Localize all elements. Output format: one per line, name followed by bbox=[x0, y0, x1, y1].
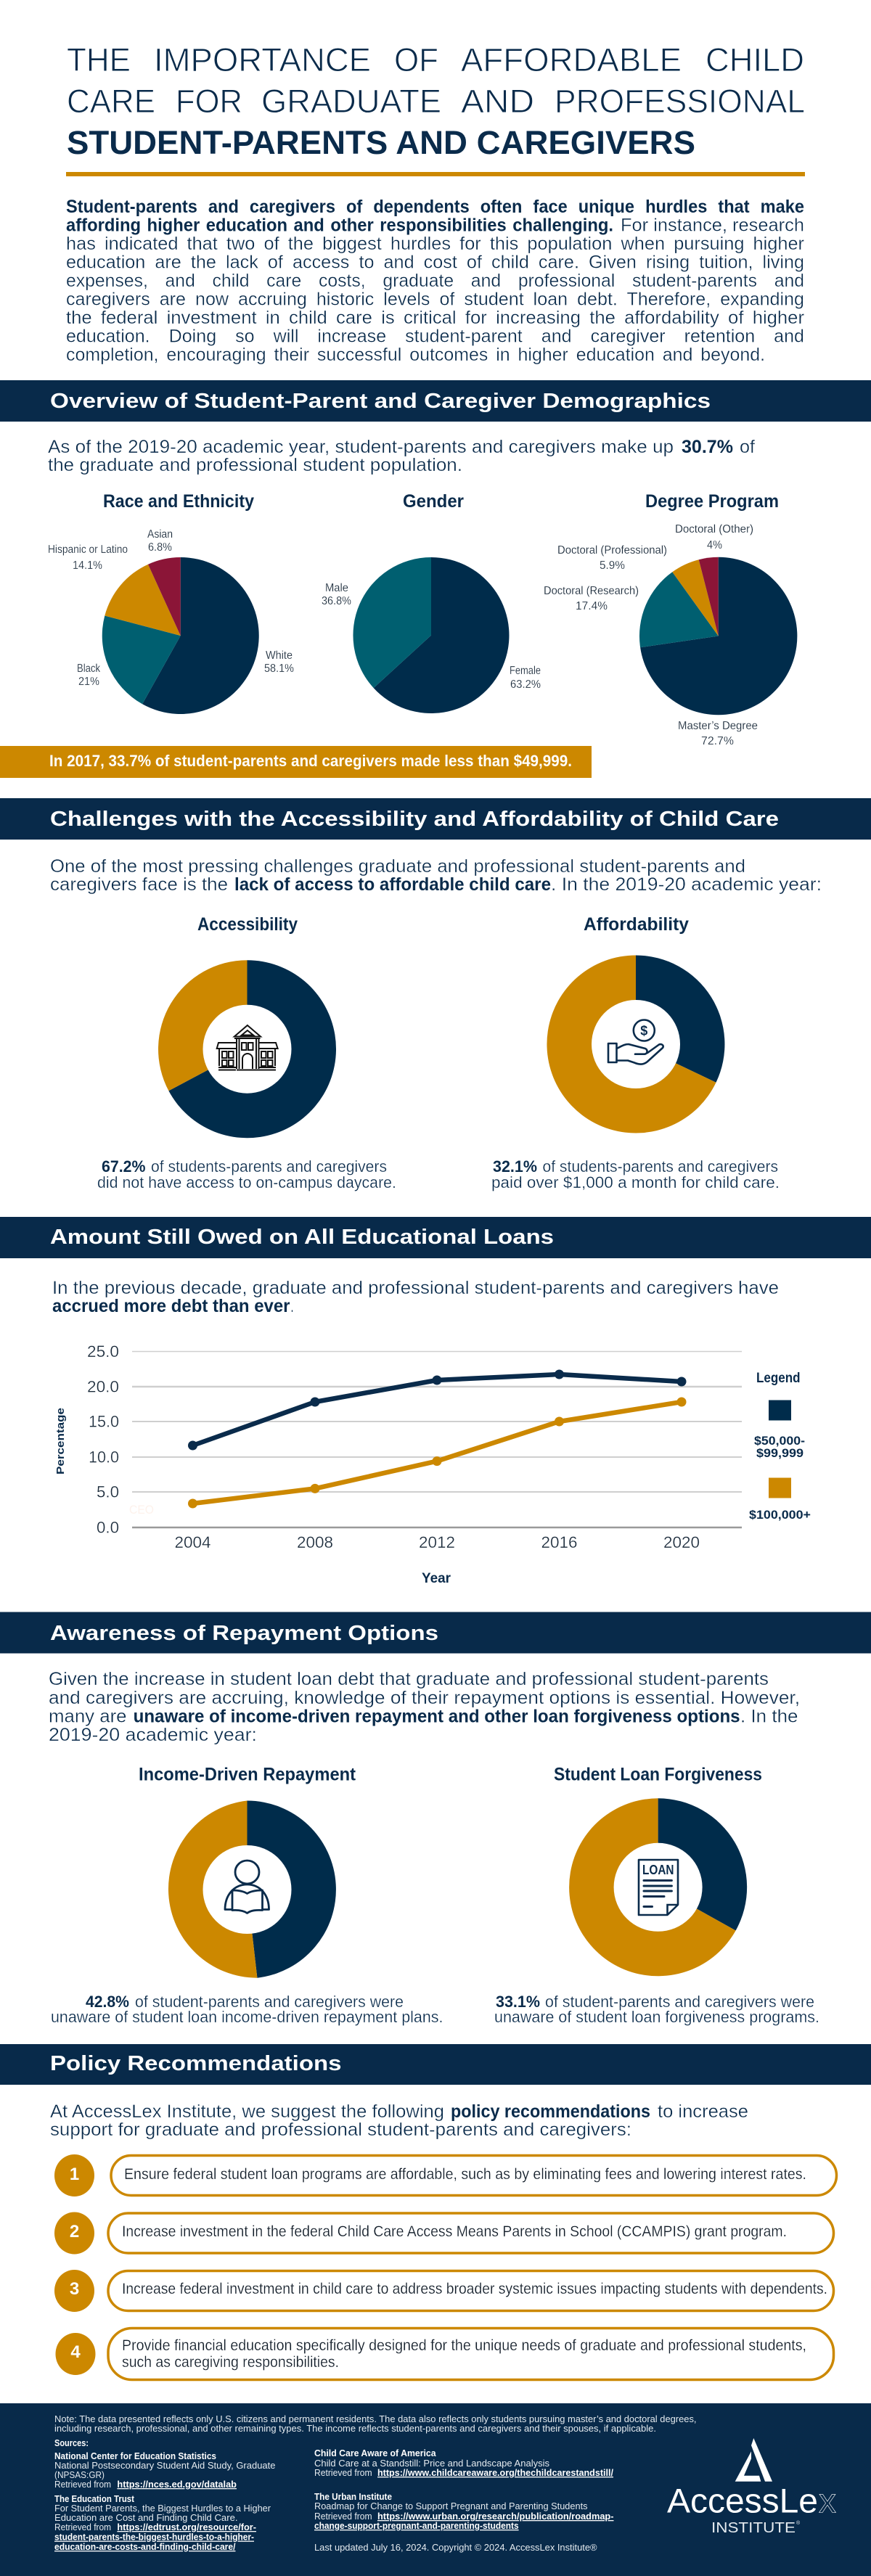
recommendation 1: Ensure federal student loan programs are affordable, such as by eliminating fees and lowering interest rates. bbox=[124, 2166, 806, 2183]
panel: gender pie bbox=[322, 491, 541, 713]
recommendation 3: Increase federal investment in child care to address broader systemic issues impacting students with dependents. bbox=[122, 2281, 827, 2297]
title: AFFORDABLE bbox=[461, 41, 682, 78]
repayment intro text: Given the increase in student loan debt that graduate and professional student-parents bbox=[49, 1669, 769, 1689]
pie labels: Male bbox=[325, 582, 348, 594]
pie labels: 58.1% bbox=[264, 663, 294, 675]
intro paragraph: expenses, and child care costs, graduate and professional student-parents and bbox=[66, 271, 804, 291]
sources left column: Retrieved from bbox=[54, 2522, 111, 2532]
challenges intro text: lack of access to affordable child care bbox=[234, 874, 551, 895]
data note: Note: The data presented reflects only U.S. citizens and permanent residents. The data also reflects only students pursuing master’s and doctoral degrees, bbox=[54, 2413, 697, 2424]
title: STUDENT-PARENTS AND CAREGIVERS bbox=[67, 124, 695, 161]
stat caption: of students-parents and caregivers bbox=[543, 1157, 778, 1176]
sources right column: The Urban Institute bbox=[314, 2491, 392, 2502]
recommendation 3 bbox=[54, 2270, 833, 2312]
intro paragraph: caregivers are now accruing historic levels of student loan debt. Therefore, expanding bbox=[66, 289, 804, 309]
pie labels: 36.8% bbox=[322, 595, 351, 607]
pie labels: 63.2% bbox=[510, 678, 541, 691]
sources right column bbox=[314, 2448, 614, 2531]
x axis labels: 2004 bbox=[174, 1533, 210, 1551]
icon: person reading bbox=[225, 1861, 269, 1913]
x axis labels: 2016 bbox=[541, 1533, 578, 1551]
pie labels: 6.8% bbox=[148, 541, 172, 554]
recommendation 2: 2 bbox=[70, 2222, 79, 2241]
sources left column: National Center for Education Statistics bbox=[54, 2450, 216, 2461]
intro paragraph: education. Doing so will increase student-parent and caregiver retention and bbox=[66, 327, 804, 347]
heading: Degree Program bbox=[645, 491, 779, 512]
policy intro text: policy recommendations bbox=[451, 2101, 650, 2122]
section: educational loans bbox=[0, 1217, 871, 1586]
sources left column: https://nces.ed.gov/datalab bbox=[117, 2479, 237, 2490]
demographics intro text: of bbox=[740, 437, 755, 457]
section header bbox=[0, 2044, 871, 2085]
section header bbox=[0, 1217, 871, 1258]
repayment intro text: 2019-20 academic year: bbox=[49, 1725, 257, 1745]
title: FOR bbox=[176, 83, 242, 120]
pie chart bbox=[353, 557, 509, 713]
stat caption: of student-parents and caregivers were bbox=[545, 1993, 814, 2011]
panel: income-driven repayment bbox=[51, 1765, 443, 2026]
stat caption bbox=[494, 1993, 819, 2026]
sources right column: Child Care at a Standstill: Price and Landscape Analysis bbox=[314, 2458, 549, 2469]
demographics intro text: 30.7% bbox=[682, 437, 733, 457]
loans intro text bbox=[52, 1278, 779, 1316]
policy intro text: At AccessLex Institute, we suggest the following bbox=[50, 2101, 444, 2122]
sources left column: Sources: bbox=[54, 2437, 89, 2448]
policy intro text: support for graduate and professional student-parents and caregivers: bbox=[50, 2120, 631, 2140]
logo: AccessLex Institute: ® bbox=[796, 2520, 801, 2526]
heading: Income-Driven Repayment bbox=[139, 1765, 356, 1785]
donut chart bbox=[168, 1801, 336, 1978]
recommendation 4 bbox=[55, 2328, 833, 2380]
legend: Legend bbox=[756, 1371, 800, 1386]
stat caption: 67.2% bbox=[102, 1157, 145, 1176]
sources left column: student-parents-the-biggest-hurdles-to-a-higher- bbox=[54, 2531, 254, 2543]
stat caption: 33.1% bbox=[496, 1993, 540, 2011]
pie labels: 4% bbox=[707, 539, 722, 551]
title rule bbox=[66, 172, 805, 176]
repayment intro text: . In the bbox=[740, 1707, 798, 1727]
recommendation 1 bbox=[54, 2154, 836, 2196]
data note: including research, professional, and other remaining types. The income reflects student-parents and caregivers and their spouses, if applicable. bbox=[54, 2423, 656, 2434]
stat caption: did not have access to on-campus daycare. bbox=[97, 1173, 396, 1191]
policy intro text bbox=[50, 2101, 748, 2140]
pie labels bbox=[322, 582, 541, 691]
recommendation 1: 1 bbox=[70, 2165, 79, 2184]
repayment intro text: many are bbox=[49, 1707, 126, 1727]
x axis labels: 2020 bbox=[663, 1533, 700, 1551]
sources left column: National Postsecondary Student Aid Study, Graduate bbox=[54, 2460, 276, 2471]
recommendation 2: Increase investment in the federal Child Care Access Means Parents in School (CCAMPIS) grant program. bbox=[122, 2223, 787, 2240]
challenges intro text: . In the 2019-20 academic year: bbox=[551, 874, 822, 895]
section header bbox=[0, 380, 871, 422]
sources right column: Retrieved from bbox=[314, 2511, 372, 2522]
sources right column: Retrieved from bbox=[314, 2467, 372, 2478]
section: child care challenges bbox=[0, 798, 871, 1191]
legend: $50,000- bbox=[754, 1434, 805, 1448]
pie labels: Doctoral (Other) bbox=[675, 523, 753, 536]
panel: affordability bbox=[491, 914, 780, 1191]
stat caption bbox=[97, 1157, 396, 1191]
sources left column: education-are-costs-and-finding-child-care/ bbox=[54, 2541, 236, 2552]
data note bbox=[54, 2413, 697, 2434]
heading: Student Loan Forgiveness bbox=[554, 1765, 762, 1785]
heading: Race and Ethnicity bbox=[103, 491, 254, 512]
section: policy recommendations bbox=[0, 2044, 871, 2380]
stat caption: 42.8% bbox=[86, 1993, 129, 2011]
loans intro text: In the previous decade, graduate and professional student-parents and caregivers have bbox=[52, 1278, 779, 1298]
donut chart bbox=[547, 955, 724, 1133]
y axis labels: 10.0 bbox=[89, 1448, 119, 1466]
sources left column: Retrieved from bbox=[54, 2479, 111, 2490]
panel: degree program pie bbox=[544, 491, 797, 747]
y axis labels: 5.0 bbox=[97, 1483, 119, 1501]
sources left column: https://edtrust.org/resource/for- bbox=[117, 2522, 256, 2532]
logo: AccessLex Institute: x bbox=[819, 2482, 836, 2519]
pie chart bbox=[102, 557, 259, 714]
section header: Challenges with the Accessibility and Affordability of Child Care bbox=[50, 808, 779, 831]
pie labels: 72.7% bbox=[701, 735, 734, 747]
pie labels: 14.1% bbox=[73, 559, 102, 572]
y axis labels: 20.0 bbox=[87, 1377, 119, 1396]
intro paragraph: For instance, research bbox=[621, 215, 804, 235]
pie labels: 5.9% bbox=[600, 559, 625, 572]
panel: student loan forgiveness bbox=[494, 1765, 819, 2026]
icon: hand holding dollar coin bbox=[608, 1020, 663, 1065]
title bbox=[67, 41, 805, 161]
title: GRADUATE bbox=[261, 83, 441, 120]
intro paragraph: has indicated that two of the biggest hurdles for this population when pursuing higher bbox=[66, 234, 804, 254]
section: repayment awareness bbox=[0, 1612, 871, 2026]
x axis title: Year bbox=[422, 1571, 451, 1586]
sources right column: https://www.urban.org/research/publication/roadmap- bbox=[377, 2511, 614, 2522]
stat caption: unaware of student loan forgiveness programs. bbox=[494, 2008, 819, 2026]
policy intro text: to increase bbox=[658, 2101, 748, 2122]
y axis labels bbox=[87, 1342, 119, 1537]
intro paragraph: completion, encouraging their successful outcomes in higher education and beyond. bbox=[66, 345, 765, 365]
demographics intro text bbox=[48, 437, 755, 475]
sources right column: change-support-pregnant-and-parenting-students bbox=[314, 2520, 519, 2531]
section header: Policy Recommendations bbox=[50, 2052, 341, 2075]
sources right column: https://www.childcareaware.org/thechildcarestandstill/ bbox=[377, 2467, 613, 2478]
stat caption bbox=[51, 1993, 443, 2026]
title: OF bbox=[394, 41, 438, 78]
recommendation 4: such as caregiving responsibilities. bbox=[122, 2354, 339, 2371]
donut chart bbox=[569, 1798, 747, 1976]
pie chart bbox=[639, 557, 797, 715]
logo: AccessLex Institute: INSTITUTE bbox=[711, 2520, 796, 2536]
recommendation 3: 3 bbox=[70, 2279, 79, 2299]
y axis title: Percentage bbox=[54, 1408, 67, 1474]
pie labels: Asian bbox=[147, 528, 173, 541]
x axis labels: 2008 bbox=[297, 1533, 333, 1551]
section: demographics bbox=[0, 380, 871, 778]
legend: $100,000+ bbox=[749, 1508, 811, 1522]
intro paragraph: education are the lack of access to and cost of child care. Given rising tuition, living bbox=[66, 253, 804, 273]
pie labels: Hispanic or Latino bbox=[48, 543, 128, 556]
logo: AccessLex Institute: AccessLe bbox=[667, 2482, 818, 2519]
faint watermark: CEO bbox=[129, 1503, 154, 1517]
last updated line: Last updated July 16, 2024. Copyright © 2024. AccessLex Institute® bbox=[314, 2542, 597, 2553]
pie labels: 21% bbox=[78, 676, 99, 688]
icon: campus building bbox=[217, 1025, 278, 1070]
sources left column: The Education Trust bbox=[54, 2493, 135, 2504]
recommendation 4: Provide financial education specifically designed for the unique needs of graduate and professional students, bbox=[122, 2337, 806, 2354]
sources right column: Child Care Aware of America bbox=[314, 2448, 436, 2458]
icon: hand holding dollar coin: $ bbox=[640, 1023, 647, 1038]
legend bbox=[749, 1371, 811, 1522]
section header: Overview of Student-Parent and Caregiver Demographics bbox=[50, 390, 711, 413]
intro paragraph bbox=[66, 197, 804, 365]
loans intro text: . bbox=[290, 1296, 294, 1316]
stat caption: paid over $1,000 a month for child care. bbox=[491, 1173, 780, 1191]
logo: AccessLex Institute bbox=[667, 2438, 836, 2536]
donut chart bbox=[158, 960, 336, 1138]
icon: loan document bbox=[639, 1860, 678, 1915]
heading: Gender bbox=[403, 491, 464, 512]
section header: Amount Still Owed on All Educational Loans bbox=[50, 1226, 554, 1249]
x axis labels: 2012 bbox=[419, 1533, 455, 1551]
recommendation 2 bbox=[54, 2212, 833, 2254]
stat caption: unaware of student loan income-driven repayment plans. bbox=[51, 2008, 443, 2026]
sources left column: (NPSAS:GR) bbox=[54, 2469, 105, 2480]
pie labels bbox=[48, 528, 294, 688]
y axis labels: 25.0 bbox=[87, 1342, 119, 1361]
y axis labels: 15.0 bbox=[89, 1412, 119, 1431]
intro paragraph: affording higher education and other responsibilities challenging. bbox=[66, 215, 613, 235]
x axis labels bbox=[174, 1533, 700, 1551]
y axis labels: 0.0 bbox=[97, 1518, 119, 1537]
sources left column: Education are Cost and Finding Child Care. bbox=[54, 2512, 238, 2523]
stat caption: 32.1% bbox=[493, 1157, 537, 1176]
callout: income: In 2017, 33.7% of student-parents and caregivers made less than $49,999. bbox=[49, 752, 572, 770]
repayment intro text: unaware of income-driven repayment and other loan forgiveness options bbox=[134, 1707, 740, 1727]
title: CARE bbox=[67, 83, 155, 120]
pie labels: 17.4% bbox=[576, 600, 608, 612]
footer bbox=[0, 2403, 871, 2576]
panel: accessibility bbox=[97, 914, 396, 1191]
title: CHILD bbox=[706, 41, 804, 78]
loans intro text: accrued more debt than ever bbox=[52, 1296, 290, 1316]
legend: $99,999 bbox=[756, 1446, 803, 1460]
icon: loan document: LOAN bbox=[642, 1863, 674, 1877]
pie labels: Master’s Degree bbox=[678, 720, 758, 732]
pie labels: Black bbox=[77, 663, 100, 675]
line chart bbox=[54, 1342, 811, 1586]
intro paragraph: the federal investment in child care is critical for increasing the affordability of higher bbox=[66, 308, 804, 328]
repayment intro text bbox=[49, 1669, 800, 1745]
sources left column bbox=[54, 2437, 276, 2552]
pie labels: Doctoral (Research) bbox=[544, 585, 639, 597]
demographics intro text: the graduate and professional student population. bbox=[48, 455, 462, 475]
challenges intro text bbox=[50, 856, 822, 895]
recommendation 4: 4 bbox=[70, 2342, 81, 2362]
pie labels: Female bbox=[510, 665, 541, 677]
section header: Awareness of Repayment Options bbox=[50, 1622, 438, 1645]
line: $50,000-$99,999 bbox=[188, 1370, 687, 1450]
demographics intro text: As of the 2019-20 academic year, student-parents and caregivers make up bbox=[48, 437, 674, 457]
challenges intro text: caregivers face is the bbox=[50, 874, 228, 895]
panel: race and ethnicity pie bbox=[48, 491, 294, 714]
title: AND bbox=[461, 83, 534, 120]
stat caption: of student-parents and caregivers were bbox=[135, 1993, 404, 2011]
section header bbox=[0, 798, 871, 840]
heading: Affordability bbox=[584, 914, 689, 935]
pie labels bbox=[544, 523, 758, 747]
title: THE bbox=[67, 41, 131, 78]
challenges intro text: One of the most pressing challenges graduate and professional student-parents and bbox=[50, 856, 745, 877]
stat caption: of students-parents and caregivers bbox=[151, 1157, 387, 1176]
sources right column: Roadmap for Change to Support Pregnant and Parenting Students bbox=[314, 2501, 588, 2511]
section header bbox=[0, 1612, 871, 1653]
sources left column: For Student Parents, the Biggest Hurdles to a Higher bbox=[54, 2503, 271, 2514]
repayment intro text: and caregivers are accruing, knowledge of their repayment options is essential. However, bbox=[49, 1688, 800, 1708]
pie labels: White bbox=[266, 649, 293, 662]
heading: Accessibility bbox=[197, 914, 298, 935]
title: IMPORTANCE bbox=[154, 41, 371, 78]
title: PROFESSIONAL bbox=[555, 83, 805, 120]
stat caption bbox=[491, 1157, 780, 1191]
intro paragraph: Student-parents and caregivers of dependents often face unique hurdles that make bbox=[66, 197, 804, 217]
pie labels: Doctoral (Professional) bbox=[557, 544, 667, 557]
line: $100,000+ bbox=[188, 1398, 687, 1508]
callout: income bbox=[0, 746, 592, 778]
